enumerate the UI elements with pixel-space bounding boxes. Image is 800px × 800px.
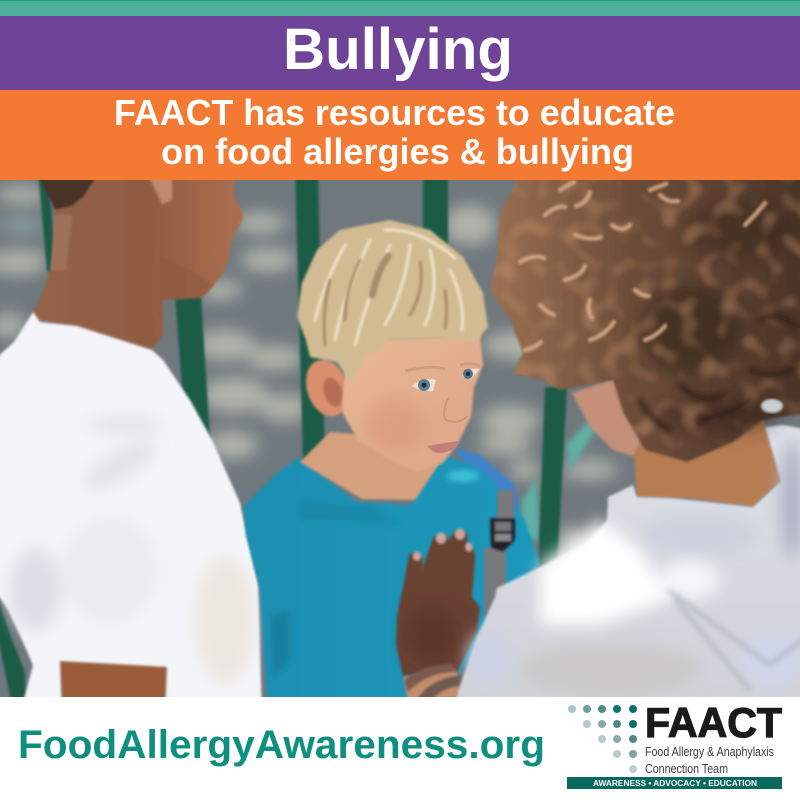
painted teal ground marks bbox=[520, 420, 596, 540]
left child white t-shirt bbox=[0, 312, 262, 715]
centre child nose and mouth bbox=[427, 398, 467, 453]
logo dot grid bbox=[568, 705, 637, 773]
logo organisation name: Food Allergy & Anaphylaxis bbox=[645, 744, 774, 759]
logo organisation name: Connection Team bbox=[645, 761, 728, 776]
logo tagline bar bbox=[567, 777, 782, 789]
left child forearm bbox=[59, 660, 168, 697]
logo wordmark: FAACT bbox=[645, 699, 782, 746]
title banner bbox=[0, 16, 800, 90]
title banner: Bullying bbox=[283, 17, 513, 82]
centre child face bbox=[342, 335, 483, 472]
subtitle banner: FAACT has resources to educate bbox=[114, 92, 675, 133]
right child grey hoodie bbox=[450, 425, 800, 715]
subtitle banner bbox=[0, 90, 800, 180]
FAACT logo bbox=[567, 699, 782, 789]
right child wet glint in hair bbox=[761, 399, 783, 413]
right child bbox=[450, 170, 800, 715]
centre child eyes bbox=[405, 364, 480, 391]
website address: FoodAllergyAwareness.org bbox=[18, 723, 545, 767]
centre child backpack strap and buckle bbox=[484, 490, 515, 618]
photo: three children at a green fence bbox=[0, 170, 800, 715]
logo tagline bar: AWARENESS • ADVOCACY • EDUCATION bbox=[593, 779, 757, 788]
logo organisation name bbox=[645, 744, 774, 776]
wristbands on arm bbox=[402, 664, 462, 697]
centre child bbox=[243, 220, 540, 715]
right child curly hair bbox=[490, 170, 800, 462]
pavement background bbox=[0, 180, 800, 697]
centre child ear bbox=[304, 358, 346, 418]
centre child turquoise t-shirt bbox=[243, 455, 540, 715]
centre child neck bbox=[300, 432, 443, 500]
left child head and neck bbox=[30, 170, 243, 352]
centre child backpack strap top bbox=[454, 447, 521, 512]
centre child blond hair bbox=[297, 220, 488, 382]
left child bbox=[0, 170, 262, 715]
right child neck and cheek bbox=[572, 375, 782, 507]
fence bars bbox=[0, 170, 567, 710]
subtitle banner: on food allergies & bullying bbox=[161, 131, 634, 172]
top teal band bbox=[0, 0, 800, 16]
hand on chest bbox=[396, 528, 480, 676]
